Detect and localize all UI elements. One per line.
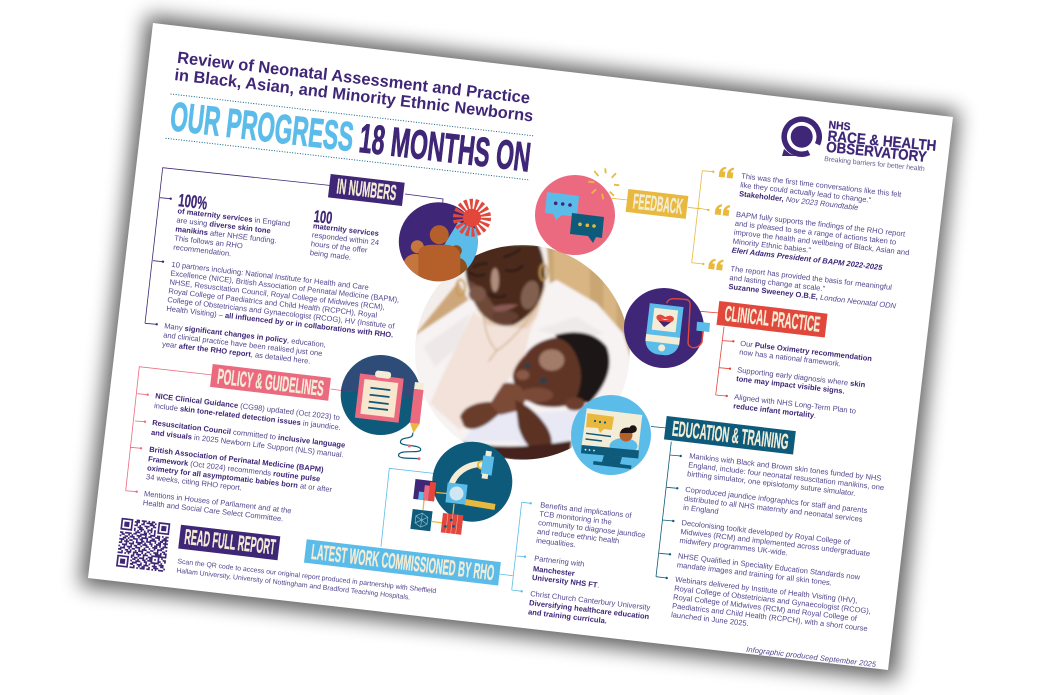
quote mark 1 bbox=[719, 166, 734, 179]
toolkit item: midwifery programmes UK-wide. bbox=[679, 536, 788, 557]
BAPM item: British Association of Perinatal Medicine (BAPM) bbox=[149, 445, 325, 474]
in numbers heading: IN NUMBERS bbox=[335, 174, 398, 205]
panel: in numbers bbox=[145, 168, 485, 367]
quote 1: like they could actually lead to change." bbox=[740, 180, 872, 205]
quote 2 bbox=[715, 204, 912, 275]
panel: read full report bbox=[116, 519, 437, 604]
QR caption: Hallam University, University of Nottingham and Bradford Teaching Hospitals. bbox=[176, 568, 411, 602]
headline: 18 MONTHS ON bbox=[357, 115, 533, 180]
webinars item: Webinars delivered by Institute of Health Visiting (IHV), bbox=[675, 575, 858, 605]
partners text: 10 partners including: National Institute for Health and Care bbox=[171, 260, 369, 292]
resuscitation item: Resuscitation Council committed to inclusive language bbox=[152, 418, 346, 450]
jaundice item: distributed to all NHS maternity and neonatal services bbox=[684, 494, 863, 524]
webinars item: Paediatrics and Child Health (RCPCH), with a short course bbox=[672, 601, 868, 633]
logo wordmark: NHS bbox=[828, 119, 851, 133]
stat: 100%: manikins after NHSE funding. bbox=[175, 224, 277, 245]
webinars item: Royal College of Midwives (RCM) and Royal College of bbox=[673, 592, 858, 623]
panel: clinical practice bbox=[624, 288, 873, 425]
quote 3: Suzanne Sweeney O.B.E, London Neonatal ODN bbox=[728, 282, 897, 311]
clinical connector bbox=[700, 311, 733, 396]
stat: 100%: This follows an RHO bbox=[174, 233, 243, 250]
panel: latest work commissioned: LATEST WORK COMMISSIONED BY RHO bbox=[310, 540, 496, 585]
quote 3: The report has provided the basis for meaningful bbox=[730, 264, 893, 292]
logo wordmark: RACE & HEALTH bbox=[827, 128, 937, 155]
diagnosis item: tone may impact visible signs. bbox=[736, 374, 845, 396]
logo strapline: Breaking barriers for better health bbox=[824, 155, 925, 173]
clinical heading bbox=[716, 301, 828, 338]
partnering item: University NHS FT. bbox=[532, 573, 600, 590]
stat: 100: hours of the offer bbox=[310, 239, 368, 255]
education heading bbox=[664, 416, 796, 455]
stat: 100%: recommendation. bbox=[173, 242, 232, 258]
quote 1 bbox=[719, 166, 903, 217]
partners text: NHSE, Resuscitation Council, Royal College of Midwives (RCM), bbox=[169, 277, 385, 312]
QR caption: Scan the QR code to access our original report produced in partnership with Sheffield bbox=[177, 558, 437, 595]
stat: 100%: of maternity services in England bbox=[177, 206, 291, 229]
panel: policy and guidelines bbox=[126, 355, 424, 524]
latest work heading bbox=[304, 539, 501, 586]
NHSE item: NHSE Qualified in Speciality Education Standards now bbox=[677, 551, 861, 582]
quote 2: BAPM fully supports the findings of the RHO report bbox=[735, 210, 907, 239]
icon: clipboard and pencil bbox=[341, 355, 424, 460]
panel: policy and guidelines: POLICY & GUIDELINES bbox=[216, 365, 325, 401]
education connector bbox=[651, 426, 681, 578]
icon: speech bubbles bbox=[535, 168, 619, 255]
canterbury item: Christ Church Canterbury University bbox=[530, 589, 651, 612]
icon: people bbox=[399, 202, 483, 282]
credit line: Infographic produced September 2025 bbox=[746, 645, 877, 669]
TCB item: and reduce ethnic health bbox=[537, 527, 620, 545]
policy heading bbox=[210, 364, 331, 402]
BAPM item: oximetry for all asymptomatic babies born at or after bbox=[147, 463, 333, 494]
title bbox=[166, 49, 535, 180]
partnering item: Partnering with bbox=[534, 554, 585, 569]
stat: 100 bbox=[309, 207, 381, 265]
title subtitle lines: Review of Neonatal Assessment and Practice bbox=[176, 49, 531, 107]
toolkit item: Decolonising toolkit developed by Royal College of bbox=[681, 518, 851, 547]
quote 2: Eleri Adams President of BAPM 2022-2025 bbox=[731, 246, 884, 272]
TCB item: TCB monitoring in the bbox=[539, 509, 612, 527]
quote mark 2 bbox=[715, 204, 730, 216]
manikins item: England, include: four neonatal resuscitation manikins, one bbox=[688, 460, 885, 492]
quote 3: and lasting change at scale." bbox=[729, 273, 826, 293]
logo wordmark: OBSERVATORY bbox=[825, 139, 927, 166]
panel: education and training bbox=[571, 395, 886, 642]
education dots bbox=[666, 455, 682, 579]
latest work connector bbox=[381, 468, 531, 591]
logo bbox=[778, 113, 937, 173]
TCB item: inequalities. bbox=[536, 536, 576, 549]
partners text: Royal College of Paediatrics and Child Health (RCPCH), Royal bbox=[168, 286, 378, 320]
partners text: Excellence (NICE), British Association of Perinatal Medicine (BAPM), bbox=[170, 269, 400, 304]
quote 2: Minority Ethnic babies." bbox=[732, 237, 812, 255]
webinars item: launched in June 2025. bbox=[671, 610, 749, 628]
icon: video call monitor bbox=[571, 395, 651, 475]
logo wordmark bbox=[825, 119, 937, 166]
stat: 100%: are using diverse skin tone bbox=[176, 215, 271, 235]
feedback dots bbox=[702, 170, 714, 265]
paper sheet bbox=[88, 23, 953, 670]
NICE item: include skin tone-related detection issues in jaundice. bbox=[154, 401, 341, 432]
quote 2: improve the health and wellbeing of Black, Asian and bbox=[733, 228, 910, 257]
stat: 100: maternity services bbox=[312, 221, 379, 238]
stat: 100% bbox=[173, 190, 291, 265]
panel: feedback: FEEDBACK bbox=[632, 189, 684, 219]
jaundice item: in England bbox=[683, 503, 719, 516]
TCB item: community to diagnose jaundice bbox=[538, 518, 646, 540]
clinical dots bbox=[726, 340, 734, 397]
NHSE item: mandate images and training for all skin tones. bbox=[676, 560, 832, 587]
partners text: Health Visiting) – all influenced by or in collaborations with RHO. bbox=[166, 304, 394, 340]
headline: OUR PROGRESS bbox=[168, 93, 356, 160]
toolkit item: Midwives (RCM) and implemented across undergraduate bbox=[680, 527, 871, 558]
NICE item: NICE Clinical Guidance (CG98) updated (Oct 2023) to bbox=[155, 391, 340, 422]
icon: red sunburst bbox=[459, 205, 485, 231]
webinars item: Royal College of Obstetricians and Gynaecologist (RCOG), bbox=[674, 584, 871, 616]
quote 2: and is pleased to see a range of actions taken to bbox=[734, 219, 897, 247]
panel: feedback bbox=[535, 166, 912, 311]
quote mark 3 bbox=[708, 258, 724, 271]
in numbers connector bbox=[145, 168, 443, 324]
diagnosis item: Supporting early diagnosis where skin bbox=[737, 365, 866, 389]
panel: latest work commissioned bbox=[304, 442, 651, 630]
pulse item: now has a national framework. bbox=[739, 347, 841, 368]
manikins item: birthing simulator, one episiotomy suture simulator. bbox=[687, 469, 856, 498]
parliament item: Mentions in Houses of Parliament and at the bbox=[143, 489, 292, 515]
parliament item: Health and Social Care Select Committee. bbox=[142, 498, 284, 523]
photo: mother and baby bbox=[407, 243, 635, 463]
jaundice item: Coproduced jaundice infographics for staff and parents bbox=[685, 485, 868, 515]
partners text: College of Obstetricians and Gynaecologist (RCOG), HV (Institute of bbox=[167, 295, 396, 331]
quote 1: Stakeholder, Nov 2023 Roundtable bbox=[739, 189, 859, 212]
TCB item: Benefits and implications of bbox=[540, 500, 633, 520]
stat: 100: responded within 24 bbox=[311, 230, 380, 247]
stat: 100: being made. bbox=[309, 248, 352, 262]
title subtitle lines: in Black, Asian, and Minority Ethnic Newborns bbox=[174, 66, 534, 125]
changes text: year after the RHO report, as detailed here. bbox=[162, 339, 311, 366]
in numbers heading bbox=[328, 174, 405, 206]
icon: pulse oximeter bbox=[624, 288, 710, 368]
plan item: Aligned with NHS Long-Term Plan to bbox=[734, 392, 856, 416]
pulse item: Our Pulse Oximetry recommendation bbox=[740, 339, 872, 363]
BAPM item: 34 weeks, citing RHO report. bbox=[146, 472, 242, 492]
latest work dots bbox=[520, 502, 532, 592]
BAPM item: Framework (Oct 2024) recommends routine pulse bbox=[148, 454, 321, 483]
read full report heading bbox=[178, 524, 280, 560]
policy dots bbox=[136, 394, 149, 493]
panel: read full report: READ FULL REPORT bbox=[183, 525, 277, 559]
feedback connector bbox=[612, 171, 713, 264]
stat: 100%: 100% bbox=[177, 190, 208, 213]
panel: education and training: EDUCATION & TRAINING bbox=[671, 417, 790, 454]
canterbury item: and training curricula. bbox=[528, 607, 607, 626]
connector dots bbox=[156, 198, 172, 325]
quote 1: This was the first time conversations like this felt bbox=[741, 171, 903, 199]
changes text: and clinical practice have been realised just one bbox=[163, 330, 323, 358]
panel: clinical practice: CLINICAL PRACTICE bbox=[723, 302, 822, 337]
icon: microscope bbox=[410, 442, 512, 535]
manikins item: Manikins with Black and Brown skin tones funded by NHS bbox=[689, 451, 882, 483]
QR code bbox=[116, 519, 170, 571]
partnering item: Manchester bbox=[533, 564, 575, 578]
canterbury item: Diversifying healthcare education bbox=[529, 598, 650, 621]
resuscitation item: and visuals in 2025 Newborn Life Support (NLS) manual. bbox=[151, 428, 344, 459]
policy connector bbox=[126, 367, 345, 492]
stat: 100: 100 bbox=[313, 207, 333, 228]
plan item: reduce infant mortality. bbox=[733, 401, 817, 420]
changes text: Many significant changes in policy, education, bbox=[164, 321, 326, 349]
logo mark bbox=[778, 113, 825, 160]
quote 3 bbox=[708, 258, 899, 311]
feedback heading bbox=[626, 189, 688, 219]
